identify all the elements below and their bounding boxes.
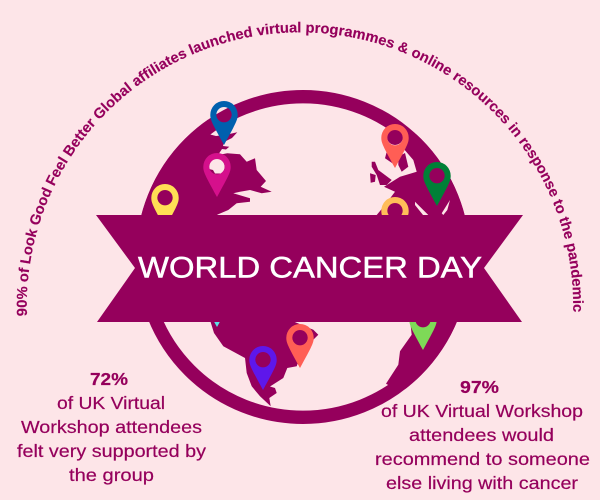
pin hole backing bbox=[387, 131, 402, 145]
stat: 72 percent: 72% bbox=[90, 369, 128, 389]
pin: orange bbox=[381, 197, 409, 241]
stat: 97 percent: of UK Virtual Workshop bbox=[381, 401, 583, 421]
pin: green bbox=[423, 162, 451, 206]
Scandinavia west bbox=[385, 152, 392, 164]
stat: 97 percent bbox=[375, 377, 590, 493]
stat: 72 percent: of UK Virtual bbox=[57, 393, 165, 413]
Africa bbox=[386, 322, 457, 390]
stat: 72 percent: the group bbox=[69, 465, 154, 485]
Eurasia bbox=[376, 134, 465, 215]
stat: 97 percent: recommend to someone bbox=[375, 449, 590, 469]
curved headline: 90% of affiliates: 90% of Look Good Feel Better Global affiliates launched virtual programmes & online resources in response to the pandemic bbox=[16, 22, 584, 316]
pin: purple bbox=[249, 346, 277, 390]
stat: 72 percent: Workshop attendees bbox=[21, 417, 202, 437]
magenta pin hole land bbox=[209, 169, 221, 175]
pin: blue bbox=[210, 101, 238, 145]
North America bbox=[141, 120, 272, 215]
stat: 97 percent: 97% bbox=[460, 377, 499, 397]
ribbon banner bbox=[96, 215, 523, 322]
stat: 72 percent bbox=[17, 369, 206, 485]
Ireland bbox=[370, 173, 376, 183]
pin: cyan bbox=[203, 283, 231, 327]
stat: 97 percent: else living with cancer bbox=[386, 473, 578, 493]
pin: coral north bbox=[381, 124, 409, 168]
globe ring bbox=[143, 97, 463, 417]
pin: yellow bbox=[151, 184, 179, 228]
pin: lime bbox=[409, 306, 437, 350]
banner title: WORLD CANCER DAY bbox=[138, 252, 482, 284]
pin: coral south bbox=[286, 324, 314, 368]
stat: 97 percent: attendees would bbox=[409, 425, 554, 445]
globe bbox=[130, 97, 475, 417]
Britain bbox=[372, 162, 392, 185]
continents bbox=[130, 115, 475, 406]
pin: magenta bbox=[203, 153, 231, 197]
stat: 72 percent: felt very supported by bbox=[17, 441, 206, 461]
South America bbox=[210, 320, 318, 406]
magenta pin cut-out bbox=[209, 159, 225, 175]
Scandinavia east bbox=[398, 153, 408, 172]
Mediterranean inlets bbox=[415, 200, 450, 215]
